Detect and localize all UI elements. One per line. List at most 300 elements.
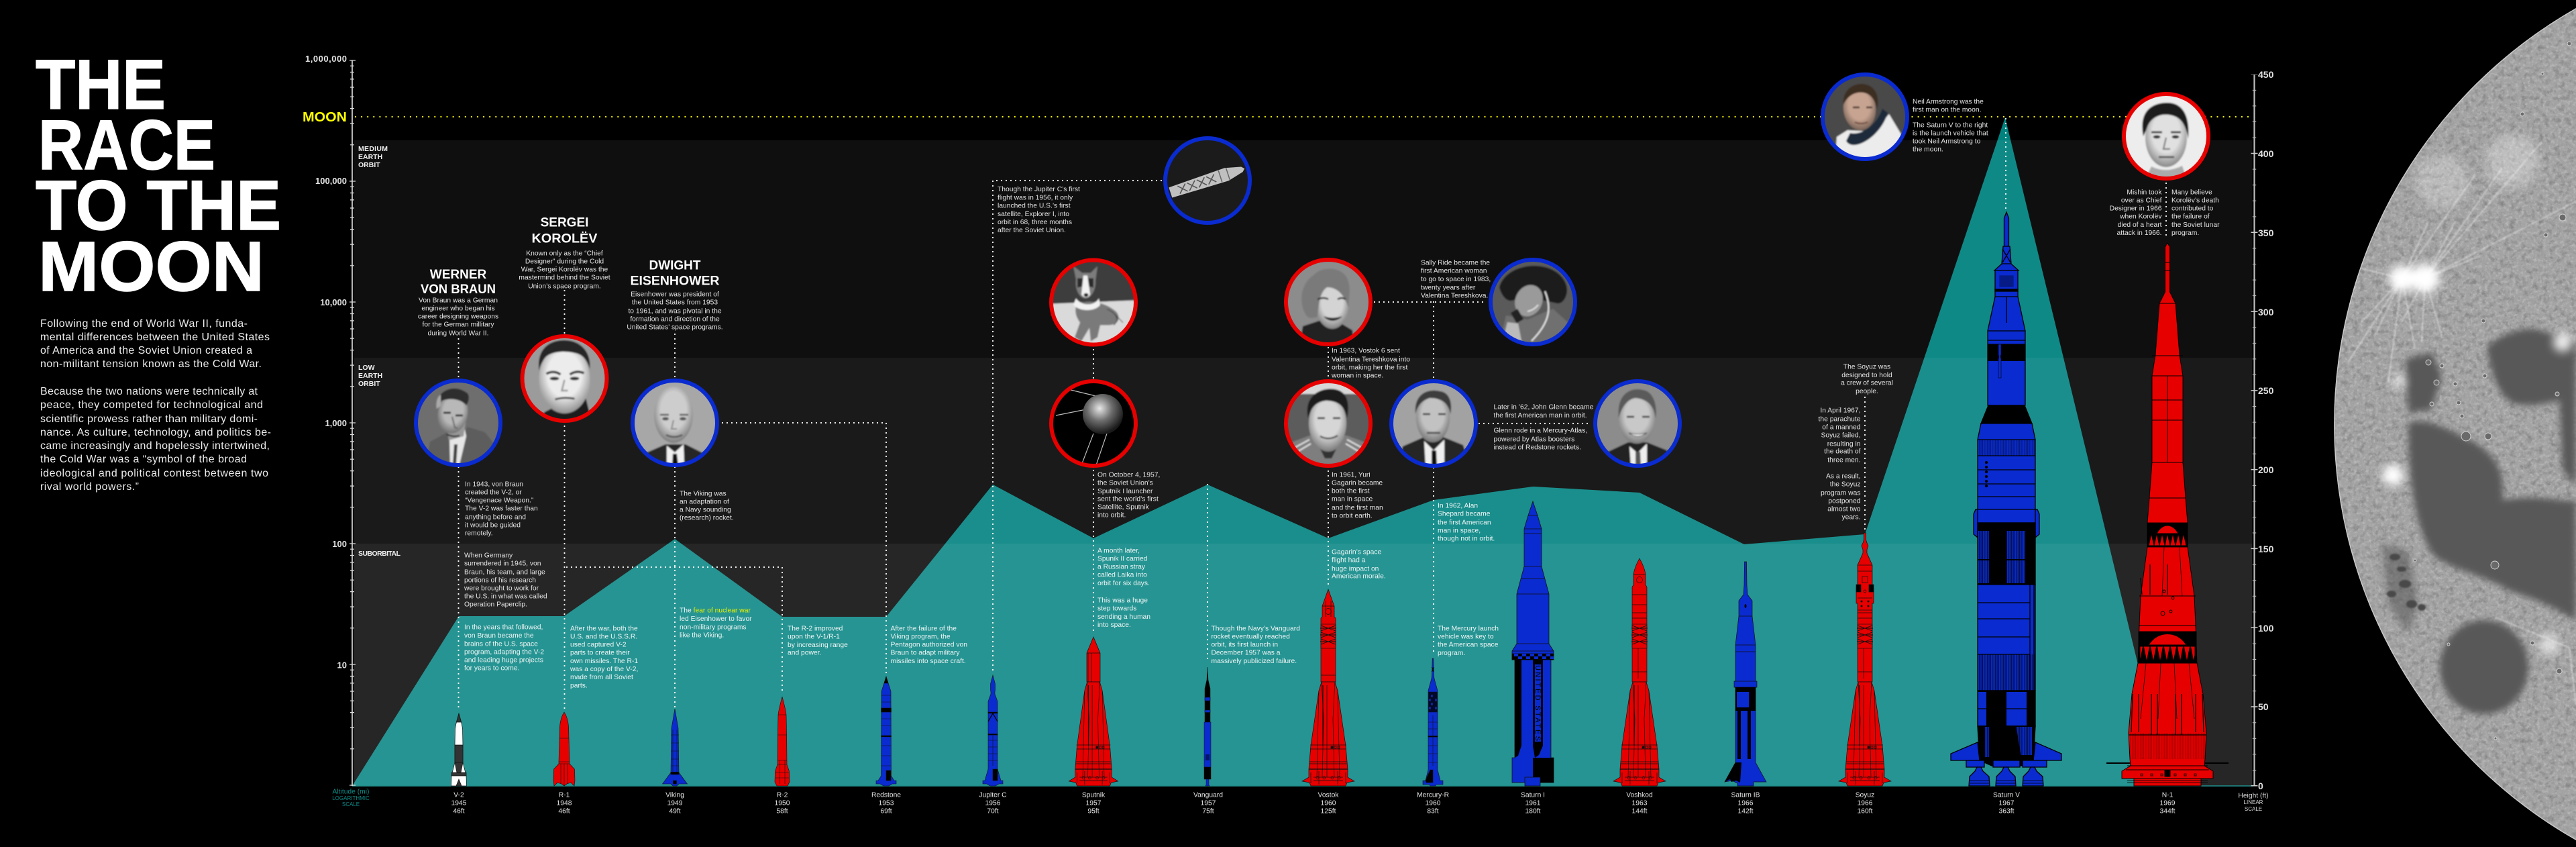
note: fear of nuclear war: like the Viking. — [680, 632, 724, 639]
label: Vanguard: 1957 — [1201, 800, 1216, 807]
note: von Braun in US: program, adapting the V-2 — [464, 648, 544, 656]
note: Mishin: over as Chief — [2121, 197, 2162, 204]
band labels: SUBORBITAL — [358, 550, 401, 558]
rocket: Voskhod — [1613, 558, 1666, 786]
portrait: Werner von Braun — [416, 381, 500, 465]
interstage — [1981, 405, 2032, 424]
band labels: ORBIT — [358, 161, 380, 169]
note: Gagarin impact: American morale. — [1332, 573, 1386, 580]
note: Redstone: missiles into space craft. — [891, 658, 966, 665]
axis labels: 450 — [2258, 69, 2274, 80]
note: Viking: The Viking was — [680, 490, 727, 498]
axis caption: altitude: Altitude (mi) — [333, 788, 369, 796]
band labels: LOW — [358, 364, 375, 372]
label: Mercury-R: 1960 — [1426, 800, 1441, 807]
band: suborbital — [354, 544, 2252, 786]
intro text: Because the two nations were technically at — [40, 386, 258, 397]
engine skirt — [2130, 733, 2205, 759]
note: Gagarin: both the first — [1332, 487, 1370, 495]
note: Gagarin impact: flight had a — [1332, 557, 1366, 564]
note: Sputnik II: This was a huge — [1097, 597, 1148, 604]
label: Viking: 49ft — [669, 808, 681, 815]
note: R-1: After the war, both the — [570, 626, 638, 632]
note: Viking: a Navy sounding — [680, 506, 731, 514]
intro text: scientific prowess rather than military domi- — [40, 413, 258, 425]
label: Jupiter C: 1956 — [985, 800, 1001, 807]
note: R-1: own missiles. The R-1 — [570, 658, 638, 665]
note: Mishin: attack in 1966. — [2117, 230, 2161, 237]
note: R-1: made from all Soviet — [570, 674, 633, 681]
note: Gagarin: to orbit earth. — [1332, 513, 1373, 519]
bio: Eisenhower: to 1961, and was pivotal in the — [628, 307, 722, 315]
label: Viking: Viking — [665, 792, 684, 799]
teal altitude area chart — [352, 117, 2167, 786]
portrait: Explorer I satellite — [1165, 138, 1250, 223]
note: V-2 creation: The V-2 was faster than — [465, 505, 538, 513]
intro text: the Cold War was a “symbol of the broad — [40, 454, 247, 465]
bio: von Braun: for the German millitary — [422, 321, 494, 329]
note: fear of nuclear war: The fear of nuclear war — [680, 607, 751, 615]
label: Saturn IB: 142ft — [1738, 808, 1754, 815]
note: Vanguard: Though the Navy’s Vanguard — [1212, 626, 1300, 632]
intro text: nance. As culture, technology, and politics be- — [40, 427, 271, 438]
note: Redstone: Pentagon authorized von — [891, 642, 967, 648]
note: Soviet lunar program: the failure of — [2171, 213, 2210, 220]
axis labels: 100 — [332, 539, 347, 549]
bio: Eisenhower: United States’ space programs. — [627, 323, 723, 332]
note: R-2: and power. — [788, 650, 821, 656]
bio: Korolev: Union’s space program. — [528, 283, 601, 290]
band: low earth orbit — [354, 358, 2252, 544]
note: V-2 creation: In 1943, von Braun — [465, 481, 523, 489]
label: Sputnik: Sputnik — [1082, 792, 1106, 799]
note: Jupiter C: orbit in 68, three months — [998, 219, 1072, 226]
label: Soyuz: 160ft — [1858, 808, 1873, 815]
portrait: Laika the dog — [1051, 260, 1136, 345]
axis labels: 10 — [337, 660, 347, 670]
band: medium earth orbit — [354, 140, 2252, 358]
note: Tereshkova: orbit, making her the first — [1332, 364, 1407, 372]
note: V-2 creation: created the V-2, or — [465, 489, 522, 497]
note: Sally Ride: twenty years after — [1421, 285, 1476, 291]
heading: Dwight Eisenhower: EISENHOWER — [631, 274, 720, 289]
note: Soyuz design: The Soyuz was — [1843, 364, 1890, 370]
rocket: Saturn I: UNITED STATES — [1534, 665, 1542, 741]
label: Viking: 1949 — [667, 800, 683, 807]
note: John Glenn: the first American man in orbit. — [1493, 412, 1587, 419]
portrait: Sally Ride — [1491, 260, 1575, 344]
heading: Werner von Braun: VON BRAUN — [421, 283, 496, 297]
note: Sputnik II: Spunik II carried — [1097, 556, 1148, 562]
note: Mercury: the American space — [1438, 642, 1499, 648]
label: Vostok: Vostok — [1318, 792, 1339, 799]
bio: Eisenhower: the United States from 1953 — [632, 299, 718, 306]
S-IC stage — [1978, 585, 2035, 691]
label: R-2: R-2 — [777, 792, 788, 799]
rocket: Saturn I — [1512, 501, 1554, 786]
note: von Braun in US: for years to come. — [464, 664, 519, 672]
note: Sputnik II: A month later, — [1097, 548, 1140, 554]
note: Mishin: when Korolëv — [2119, 213, 2162, 220]
axis labels: 350 — [2258, 228, 2274, 238]
note: Operation Paperclip: Braun, his team, and large — [464, 569, 545, 576]
label: Redstone: 69ft — [880, 808, 892, 815]
label: Saturn I: 180ft — [1525, 808, 1541, 815]
note: Sputnik II: called Laika into — [1097, 572, 1147, 579]
label: Vostok: 125ft — [1321, 808, 1336, 815]
note: Redstone: After the failure of the — [891, 626, 957, 632]
note: Neil Armstrong: first man on the moon. — [1913, 106, 1981, 114]
rocket: Mercury-Redstone — [1423, 658, 1443, 786]
portrait: Dwight Eisenhower — [633, 381, 717, 465]
right linear height axis — [2254, 69, 2274, 791]
dotted connector lines — [459, 119, 2166, 710]
title: TO THE — [36, 166, 281, 245]
side fairings — [2129, 564, 2206, 735]
axis labels: 50 — [2258, 701, 2269, 712]
note: R-1: was a copy of the V-2, — [570, 666, 638, 673]
axis caption: height: LINEAR — [2244, 799, 2263, 805]
rocket labels — [451, 792, 2176, 815]
S-II lower / interstage — [1978, 523, 2035, 585]
note: Soyuz parachute failure: the death of — [1824, 448, 1861, 455]
rocket: Viking — [663, 709, 687, 786]
note: Gagarin: In 1961, Yuri — [1332, 471, 1371, 479]
intro text: rival world powers.” — [40, 481, 139, 493]
rocket: N-1 — [2106, 243, 2229, 786]
note: Gagarin: and the first man — [1332, 505, 1383, 511]
rocket: Vanguard — [1204, 667, 1211, 786]
label: R-1: 46ft — [558, 808, 570, 815]
intro text: non-militant tension known as the Cold War. — [40, 358, 262, 370]
note: von Braun in US: von Braun became the — [464, 632, 534, 640]
bio: von Braun: Von Braun was a German — [419, 297, 498, 305]
rocket: Soyuz — [1839, 533, 1891, 786]
intro text: Following the end of World War II, funda- — [40, 318, 248, 330]
band labels: EARTH — [358, 372, 382, 380]
note: Redstone: Braun to adapt military — [891, 650, 960, 656]
note: Sally Ride: Valentina Tereshkova. — [1421, 293, 1488, 299]
note: Vanguard: orbit, its first launch in — [1212, 642, 1278, 648]
band labels: EARTH — [358, 153, 382, 161]
left logarithmic altitude axis — [305, 54, 356, 786]
note: V-2 creation: it would be guided — [465, 522, 521, 529]
note: V-2 creation: “Vengenace Weapon.” — [465, 497, 534, 505]
note: Operation Paperclip: When Germany — [464, 552, 513, 560]
label: Vanguard: Vanguard — [1193, 792, 1223, 799]
note: Alan Shepard: though not in orbit. — [1438, 536, 1495, 542]
rocket: R-2 — [775, 697, 790, 786]
note: Sputnik I: into orbit. — [1097, 511, 1126, 519]
rocket: Saturn V — [1951, 212, 2061, 786]
note: Soyuz parachute failure: Soyuz failed, — [1821, 432, 1861, 439]
note: R-1: U.S. and the U.S.S.R. — [570, 634, 637, 640]
note: Vanguard: massively publicized failure. — [1212, 658, 1297, 665]
label: Jupiter C: 70ft — [987, 808, 999, 815]
note: Sally Ride: first American woman — [1421, 267, 1487, 275]
note: Soyuz parachute failure: the Soyuz — [1830, 481, 1861, 489]
note: Sally Ride: to go to space in 1983, — [1421, 276, 1491, 283]
note: Tereshkova: In 1963, Vostok 6 sent — [1332, 348, 1400, 354]
note: fear of nuclear war: led Eisenhower to favor — [680, 615, 752, 623]
note: Tereshkova: Valentina Tereshkova into — [1332, 356, 1410, 364]
note: Alan Shepard: man in space, — [1438, 528, 1481, 534]
title: THE — [36, 46, 166, 124]
note: Sputnik II: sending a human — [1097, 613, 1150, 621]
bio: Korolev: Known only as the “Chief — [526, 250, 603, 258]
note: Operation Paperclip: Operation Paperclip. — [464, 601, 527, 608]
label: Sputnik: 1957 — [1086, 800, 1102, 807]
label: Vostok: 1960 — [1321, 800, 1336, 807]
note: V-2 creation: anything before and — [465, 514, 526, 521]
note: John Glenn: instead of Redstone rockets. — [1493, 444, 1581, 451]
bio: Korolev: mastermind behind the Soviet — [519, 274, 610, 282]
axis caption: height: SCALE — [2245, 806, 2262, 812]
label: Saturn V: 363ft — [1999, 808, 2015, 815]
note: Neil Armstrong: is the launch vehicle that — [1913, 130, 1988, 137]
heading: Sergei Korolev: SERGEI — [541, 216, 588, 230]
axis caption: height: Height (ft) — [2238, 792, 2269, 800]
note: von Braun in US: and leading huge projects — [464, 656, 543, 664]
label: Saturn IB: 1966 — [1738, 800, 1754, 807]
rocket: Redstone — [876, 677, 896, 786]
note: von Braun in US: brains of the U.S. space — [464, 640, 538, 648]
label: Mercury-R: Mercury-R — [1417, 792, 1449, 799]
label: V-2: 1945 — [451, 800, 467, 807]
note: Mercury: vehicle was key to — [1438, 634, 1494, 640]
bio: von Braun: engineer who began his — [421, 305, 495, 313]
rocket: Sputnik — [1069, 637, 1118, 786]
portrait: Valentina Tereshkova — [1286, 260, 1371, 344]
label: Sputnik: 95ft — [1087, 808, 1099, 815]
label: Mercury-R: 83ft — [1427, 808, 1439, 815]
label: Jupiter C: Jupiter C — [979, 792, 1007, 799]
bio: von Braun: during World War II. — [428, 330, 488, 337]
moon altitude dotted line and label: MOON — [303, 110, 347, 125]
label: Saturn V: Saturn V — [1993, 792, 2020, 799]
axis caption: altitude: LOGARITHMIC — [332, 795, 370, 801]
band labels: MEDIUM — [358, 145, 388, 153]
title: MOON — [38, 228, 264, 306]
note: John Glenn: powered by Atlas boosters — [1493, 436, 1574, 443]
axis labels: 1,000 — [325, 418, 347, 428]
note: Soviet lunar program: program. — [2171, 230, 2199, 237]
note: Vanguard: December 1957 was a — [1212, 650, 1281, 656]
escape tower — [2004, 212, 2008, 246]
note: Soviet lunar program: Many believe — [2171, 189, 2212, 196]
note: Gagarin: Gagarin became — [1332, 479, 1383, 487]
note: Viking: (research) rocket. — [680, 514, 734, 522]
axis labels: 150 — [2258, 544, 2274, 554]
note: Neil Armstrong: Neil Armstrong was the — [1913, 98, 1984, 106]
portrait: John Glenn — [1595, 381, 1680, 466]
note: Soyuz parachute failure: program was — [1821, 490, 1861, 497]
highland texture — [2328, 0, 2576, 847]
note: von Braun in US: In the years that followed, — [464, 624, 543, 631]
heading: Werner von Braun: WERNER — [430, 268, 486, 282]
axis labels: 100,000 — [315, 176, 347, 186]
bio: Eisenhower: formation and direction of the — [630, 315, 720, 323]
note: Gagarin impact: huge impact on — [1332, 565, 1379, 573]
engines — [1969, 767, 2043, 786]
note: John Glenn: Glenn rode in a Mercury-Atlas, — [1493, 427, 1587, 435]
note: Sally Ride: Sally Ride became the — [1421, 259, 1490, 267]
label: Saturn V: 1967 — [1999, 800, 2015, 807]
label: R-1: R-1 — [559, 792, 570, 799]
note: Sputnik I: Sputnik I launcher — [1097, 488, 1153, 495]
label: Voshkod: Voshkod — [1626, 792, 1653, 799]
note: Vanguard: rocket eventually reached — [1212, 634, 1290, 640]
rocket: R-1 — [553, 712, 575, 786]
note: V-2 creation: remotely. — [465, 530, 493, 537]
note: Mercury: program. — [1438, 650, 1465, 657]
label: Redstone: Redstone — [871, 792, 901, 799]
portrait: Neil Armstrong — [1823, 74, 1907, 159]
note: Soyuz parachute failure: In April 1967, — [1820, 407, 1861, 415]
baseline — [352, 785, 2253, 787]
note: Soyuz parachute failure: resulting in — [1827, 440, 1861, 448]
note: Alan Shepard: Shepard became — [1438, 510, 1491, 518]
note: Soyuz parachute failure: As a result, — [1826, 472, 1861, 481]
note: Soyuz parachute failure: postponed — [1828, 498, 1861, 505]
label: Soyuz: 1966 — [1858, 800, 1873, 807]
axis labels: 300 — [2258, 307, 2274, 317]
note: Mishin: died of a heart — [2118, 221, 2162, 229]
portrait: Sputnik satellite — [1051, 381, 1136, 466]
note: Soviet lunar program: Korolëv’s death — [2171, 197, 2219, 204]
note: R-1: used captured V-2 — [570, 642, 627, 648]
band labels: ORBIT — [358, 380, 380, 388]
axis labels: 200 — [2258, 464, 2274, 475]
note: Soyuz parachute failure: almost two — [1827, 506, 1861, 513]
note: Neil Armstrong: the moon. — [1913, 146, 1943, 153]
moon — [2328, 0, 2576, 847]
intro text: peace, they competed for technological and — [40, 399, 263, 411]
note: Neil Armstrong: The Saturn V to the right — [1913, 122, 1988, 129]
rocket: V-2 — [451, 713, 467, 786]
heading: Sergei Korolev: KOROLËV — [531, 232, 598, 246]
note: Neil Armstrong: took Neil Armstrong to — [1913, 138, 1981, 145]
note: Sputnik II: into space. — [1097, 621, 1131, 629]
crater rays — [2348, 141, 2576, 705]
label: Voshkod: 1963 — [1632, 800, 1648, 807]
note: Sputnik I: sent the world’s first — [1097, 495, 1159, 503]
note: Alan Shepard: the first American — [1438, 519, 1491, 526]
note: Soyuz parachute failure: years. — [1841, 514, 1861, 521]
command module — [1994, 246, 2019, 270]
label: Vanguard: 75ft — [1202, 808, 1214, 815]
note: Mishin: Mishin took — [2127, 189, 2162, 196]
note: Sputnik II: step towards — [1097, 605, 1136, 612]
note: fear of nuclear war: non-military programs — [680, 624, 747, 631]
intro text: mental differences between the United States — [40, 332, 270, 343]
label: Saturn I: Saturn I — [1521, 792, 1545, 799]
rocket: Vostok — [1302, 589, 1354, 786]
note: Alan Shepard: In 1962, Alan — [1438, 502, 1478, 510]
fins — [1951, 742, 2061, 760]
note: Mercury: The Mercury launch — [1438, 626, 1499, 632]
note: Sputnik I: Satellite, Sputnik — [1097, 503, 1150, 511]
note: R-2: upon the V-1/R-1 — [788, 634, 840, 640]
label: R-2: 58ft — [776, 808, 788, 815]
axis labels: 1,000,000 — [305, 54, 347, 64]
note: Gagarin impact: Gagarin’s space — [1332, 549, 1381, 556]
label: Saturn IB: Saturn IB — [1731, 792, 1760, 799]
heading: Dwight Eisenhower: DWIGHT — [649, 259, 701, 272]
note: Soviet lunar program: contributed to — [2171, 205, 2214, 212]
title: RACE — [38, 106, 215, 185]
note: Operation Paperclip: portions of his research — [464, 577, 536, 584]
note: Sputnik II: a Russian stray — [1097, 564, 1146, 570]
intro text: came increasingly and hopelessly intertwined, — [40, 440, 270, 452]
note: Soyuz design: designed to hold — [1841, 372, 1892, 379]
axis labels: 100 — [2258, 623, 2274, 634]
label: N-1: N-1 — [2162, 792, 2174, 799]
altitude bands — [354, 140, 2252, 786]
note: Soyuz parachute failure: of a manned — [1822, 424, 1861, 431]
note: Soyuz parachute failure: three men. — [1827, 456, 1861, 464]
note: John Glenn: Later in ’62, John Glenn became — [1493, 404, 1594, 411]
label: N-1: 1969 — [2160, 800, 2176, 807]
portrait: Alan Shepard — [1391, 381, 1476, 466]
bio: Korolev: Designer” during the Cold — [525, 258, 604, 266]
service module and S-IVB — [1988, 270, 2025, 405]
intro text: ideological and political contest between two — [40, 468, 268, 479]
rocket: Saturn IB — [1725, 562, 1766, 786]
axis labels: 250 — [2258, 385, 2274, 396]
note: Jupiter C: after the Soviet Union. — [998, 227, 1066, 234]
note: Sputnik II: orbit for six days. — [1097, 580, 1150, 587]
note: Soyuz design: people. — [1856, 388, 1878, 395]
axis labels: 400 — [2258, 148, 2274, 159]
note: R-2: The R-2 improved — [788, 626, 843, 632]
note: Jupiter C: flight was in 1956, it only — [998, 195, 1073, 201]
note: R-1: parts to create their — [570, 650, 630, 656]
rocket: Jupiter C — [983, 675, 1003, 786]
note: Operation Paperclip: surrendered in 1945, von — [464, 560, 541, 568]
note: Jupiter C: Though the Jupiter C’s first — [998, 186, 1080, 193]
bio: von Braun: career designing weapons — [418, 313, 498, 321]
intro text: of America and the Soviet Union created a — [40, 345, 252, 356]
note: Mishin: Designer in 1966 — [2110, 205, 2162, 212]
note: Viking: an adaptation of — [680, 498, 729, 506]
note: Jupiter C: launched the U.S.’s first — [998, 203, 1071, 209]
label: R-1: 1948 — [557, 800, 572, 807]
bio: Korolev: War, Sergei Korolëv was the — [521, 266, 608, 274]
note: Operation Paperclip: were brought to work for — [464, 585, 539, 592]
portrait: Vasily Mishin — [2124, 94, 2208, 179]
axis labels: 10,000 — [320, 297, 347, 307]
bio: Eisenhower: Eisenhower was president of — [631, 291, 719, 298]
lattice bands — [2147, 523, 2188, 547]
note: Operation Paperclip: the U.S. in what was called — [464, 593, 547, 600]
note: Soviet lunar program: the Soviet lunar — [2171, 221, 2220, 229]
note: Soyuz design: a crew of several — [1841, 380, 1893, 387]
note: Redstone: Viking program, the — [891, 634, 951, 640]
S-II stage — [1978, 424, 2035, 523]
label: R-2: 1950 — [775, 800, 790, 807]
portrait: Sergei Korolev — [522, 336, 606, 421]
portrait: Yuri Gagarin — [1286, 381, 1371, 466]
axis caption: altitude: SCALE — [342, 801, 360, 807]
label: Soyuz: Soyuz — [1856, 792, 1874, 799]
note: Jupiter C: satellite, Explorer I, into — [998, 211, 1069, 218]
note: R-2: by increasing range — [788, 642, 848, 649]
label: Redstone: 1953 — [879, 800, 894, 807]
axis labels: 0 — [2258, 781, 2263, 791]
label: N-1: 344ft — [2160, 808, 2176, 815]
note: Soyuz parachute failure: the parachute — [1819, 416, 1861, 423]
